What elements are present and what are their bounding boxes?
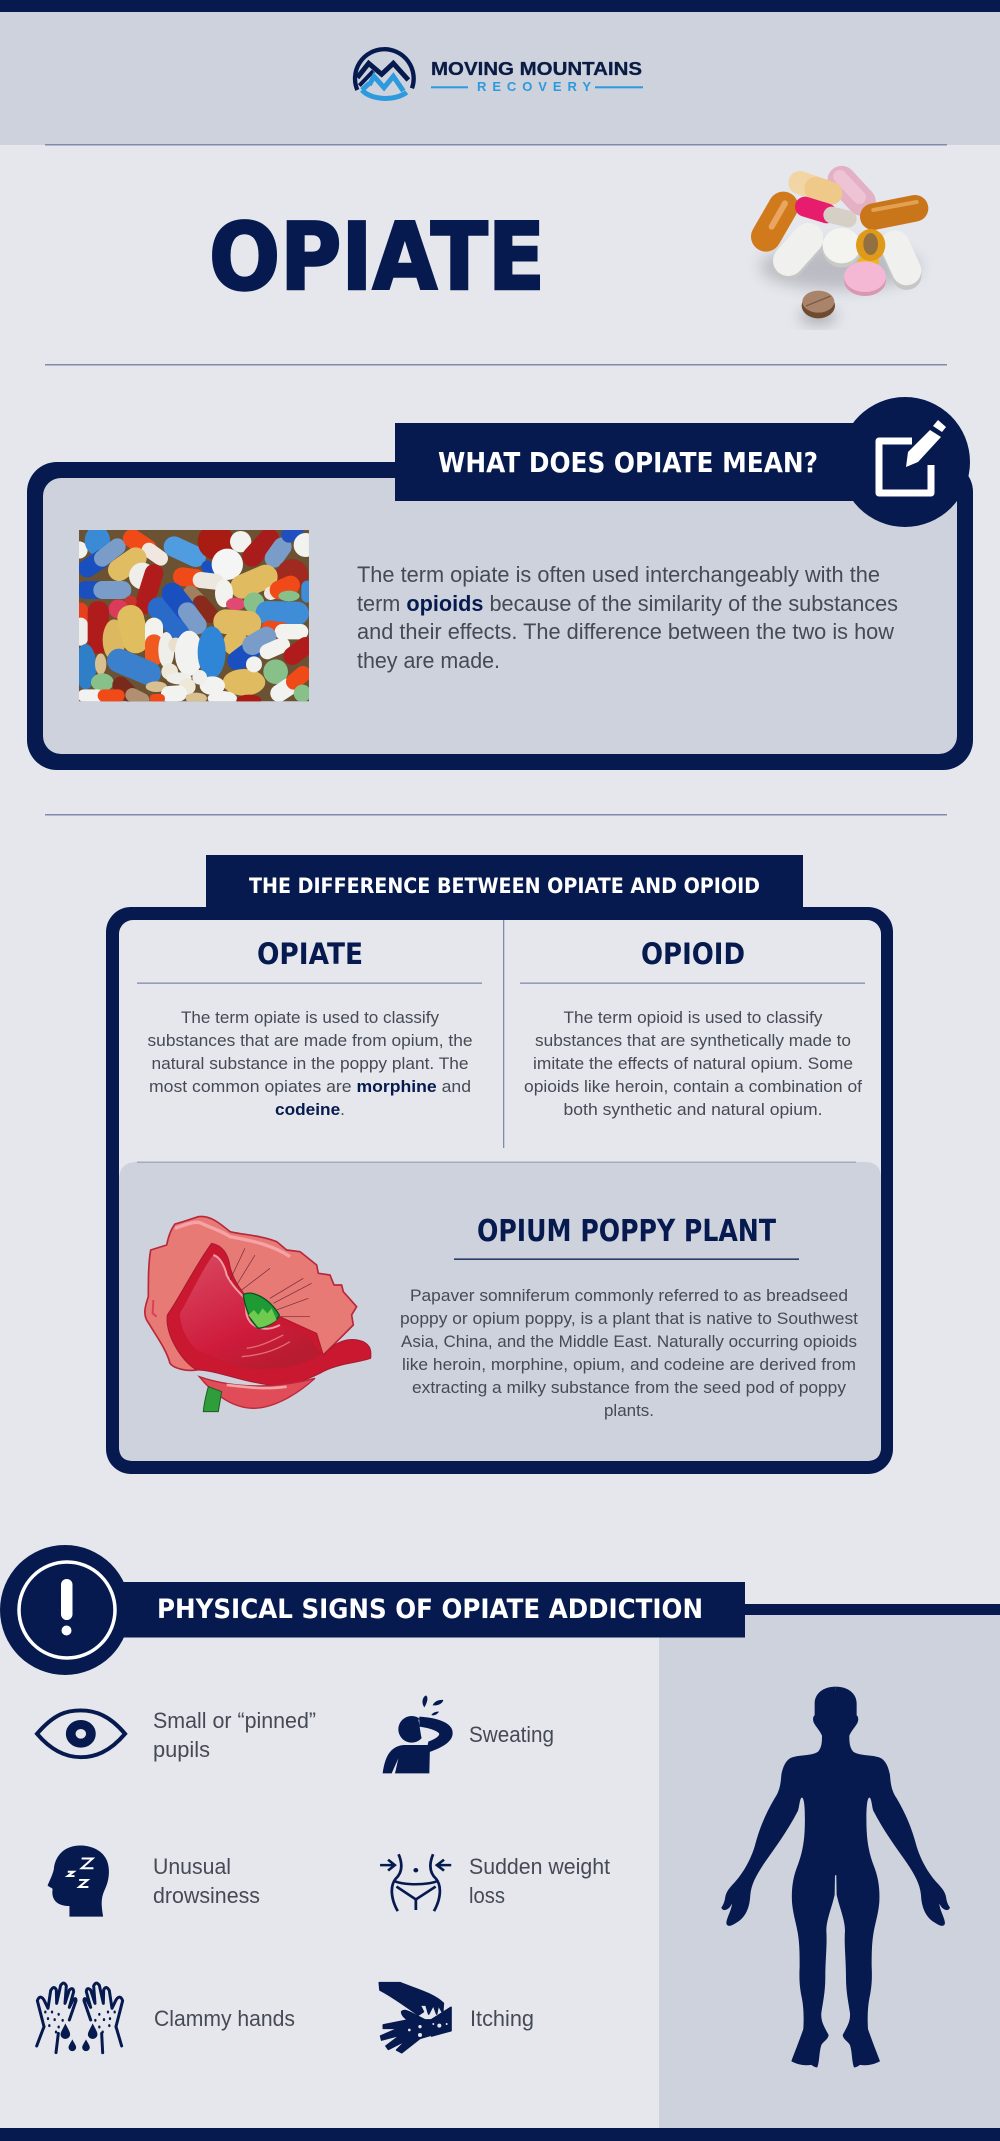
sign: sudden weight loss: [380, 1854, 610, 1911]
section banner: physical signs: [0, 1545, 1000, 1675]
sign: pinned pupils: Small or “pinned”: [153, 1708, 316, 1733]
icon: shrinking waist: [380, 1854, 451, 1911]
column: opioid: substances that are synthetically made to: [535, 1031, 851, 1050]
column: opiate: codeine.: [275, 1100, 345, 1119]
sign: itching: [379, 1983, 534, 2053]
sign: unusual drowsiness: drowsiness: [153, 1883, 260, 1908]
sign: pinned pupils: pupils: [153, 1737, 210, 1762]
column: opioid: OPIOID: [641, 937, 745, 971]
paragraph: poppy or opium poppy, is a plant that is native to Southwest: [400, 1309, 858, 1328]
paragraph: and their effects. The difference between the two is how: [357, 619, 894, 644]
sign: itching: Itching: [470, 2006, 534, 2031]
banner: [206, 855, 803, 920]
paragraph: Papaver somniferum commonly referred to as breadseed: [410, 1286, 848, 1305]
illustration: poppy flower: [145, 1216, 371, 1412]
column: opiate: natural substance in the poppy plant. The: [152, 1054, 468, 1073]
panel: what does opiate mean: [27, 397, 973, 770]
sign: sweating: [383, 1695, 554, 1773]
illustration: human body: [721, 1687, 950, 2067]
column: opioid: [520, 937, 865, 1119]
sign: unusual drowsiness: [48, 1846, 260, 1917]
sign: unusual drowsiness: Unusual: [153, 1854, 231, 1879]
sign: clammy hands: Clammy hands: [154, 2006, 295, 2031]
panel: opium poppy plant: [119, 1162, 881, 1461]
panel: difference between opiate and opioid: [106, 855, 893, 1474]
image: pile of pills: [760, 177, 920, 323]
panel: body silhouette: [659, 1615, 1000, 2128]
paragraph: plants.: [604, 1401, 654, 1420]
sign: pinned pupils: [37, 1708, 316, 1762]
column: opiate: OPIATE: [257, 937, 363, 971]
logo wordmark: MOVING MOUNTAINS: [431, 58, 642, 79]
logo icon: [355, 49, 414, 98]
column: opiate: most common opiates are morphine and: [149, 1077, 471, 1096]
image: assorted capsules: [79, 530, 309, 702]
icon: scratching arm: [379, 1983, 451, 2053]
heading: PHYSICAL SIGNS OF OPIATE ADDICTION: [157, 1594, 703, 1625]
column: opiate: [137, 937, 482, 1119]
heading: OPIUM POPPY PLANT: [477, 1214, 776, 1249]
logo wordmark: RECOVERY: [477, 79, 591, 94]
sign: sudden weight loss: loss: [469, 1883, 505, 1908]
sign: sudden weight loss: Sudden weight: [469, 1854, 610, 1879]
column: opioid: The term opioid is used to classify: [564, 1008, 823, 1027]
column: opioid: opioids like heroin, contain a combination of: [524, 1077, 862, 1096]
paragraph: Asia, China, and the Middle East. Naturally occurring opioids: [401, 1332, 857, 1351]
icon: sweating person: [383, 1695, 453, 1773]
banner: [395, 423, 875, 501]
paragraph: they are made.: [357, 648, 500, 673]
title: OPIATE: [209, 203, 545, 311]
paragraph: term opioids because of the similarity of the substances: [357, 591, 898, 616]
icon: sweaty hands: [37, 1983, 123, 2053]
sign: clammy hands: [37, 1983, 295, 2053]
paragraph: The term opiate is often used interchangeably with the: [357, 562, 880, 587]
paragraph: [400, 1286, 858, 1420]
heading: WHAT DOES OPIATE MEAN?: [438, 446, 818, 479]
column: opioid: both synthetic and natural opium.: [564, 1100, 822, 1119]
column: opioid: imitate the effects of natural opium. Some: [533, 1054, 853, 1073]
paragraph: [357, 562, 898, 673]
heading: THE DIFFERENCE BETWEEN OPIATE AND OPIOID: [249, 874, 760, 898]
sign: sweating: Sweating: [469, 1722, 554, 1747]
icon: exclamation: [0, 1545, 130, 1675]
icon: sleepy head: [48, 1846, 109, 1917]
column: opiate: The term opiate is used to classify: [181, 1008, 439, 1027]
icon: edit note: [840, 397, 970, 527]
column: opiate: substances that are made from opium, the: [148, 1031, 472, 1050]
header band with logo: [0, 0, 1000, 145]
paragraph: extracting a milky substance from the seed pod of poppy: [412, 1378, 847, 1397]
paragraph: like heroin, morphine, opium, and codeine are derived from: [402, 1355, 856, 1374]
logo wordmark: [431, 58, 643, 94]
icon: eye: [37, 1710, 125, 1757]
